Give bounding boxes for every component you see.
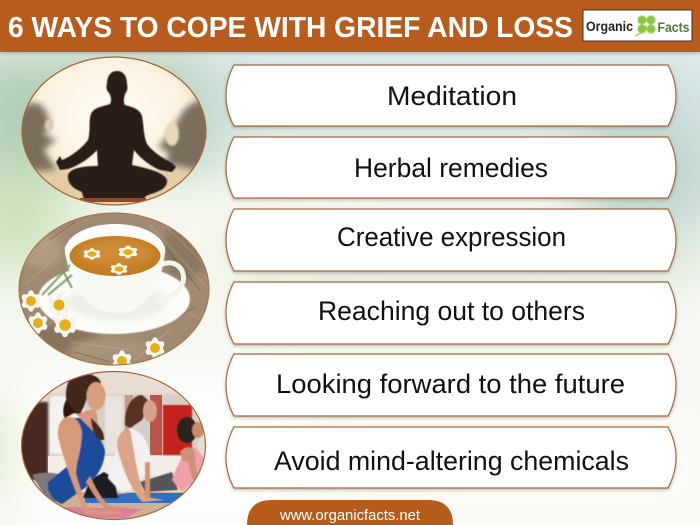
- icon: four-leaf clover: [635, 16, 656, 36]
- greens: [42, 265, 72, 295]
- logo: Organic Facts: Facts: [658, 19, 690, 35]
- panel: Meditation: Meditation: [387, 81, 517, 111]
- footer: website pill: [247, 500, 453, 525]
- header bar: [0, 0, 700, 52]
- logo: Organic Facts: Organic: [586, 18, 633, 34]
- panel: Herbal remedies: Herbal remedies: [354, 153, 548, 183]
- panel: Looking forward to the future: [226, 354, 676, 416]
- panel: Looking forward to the future: Looking forward to the future: [276, 369, 625, 399]
- photo: yoga class: [18, 368, 210, 524]
- woman 2: [83, 395, 165, 502]
- floor: [55, 492, 184, 519]
- blurred background figures: [15, 100, 212, 172]
- panel: Creative expression: Creative expression: [337, 222, 566, 252]
- pink mat: [63, 507, 143, 518]
- panel: Reaching out to others: [226, 282, 676, 344]
- title: 6 WAYS TO COPE WITH GRIEF AND LOSS: [8, 12, 573, 44]
- panel: Creative expression: [226, 209, 676, 271]
- panel: Meditation: [226, 65, 676, 126]
- footer: website pill: www.organicfacts.net: [279, 507, 421, 524]
- cup: [65, 246, 165, 313]
- woman 3: [140, 417, 204, 492]
- logo: Organic Facts: [583, 10, 692, 41]
- saucer: [38, 264, 190, 334]
- panel: Avoid mind-altering chemicals: [226, 427, 676, 488]
- panel: Reaching out to others: Reaching out to others: [318, 296, 585, 326]
- photo: chamomile tea: [15, 210, 215, 372]
- woman 1: [32, 374, 132, 514]
- handle: [162, 260, 186, 297]
- tea: [70, 236, 160, 276]
- panel: Herbal remedies: [226, 137, 676, 198]
- silhouette: [56, 71, 176, 200]
- blue mat: [85, 493, 185, 503]
- panel: Avoid mind-altering chemicals: Avoid mind-altering chemicals: [274, 446, 629, 476]
- photo: meditation silhouette: [15, 55, 212, 210]
